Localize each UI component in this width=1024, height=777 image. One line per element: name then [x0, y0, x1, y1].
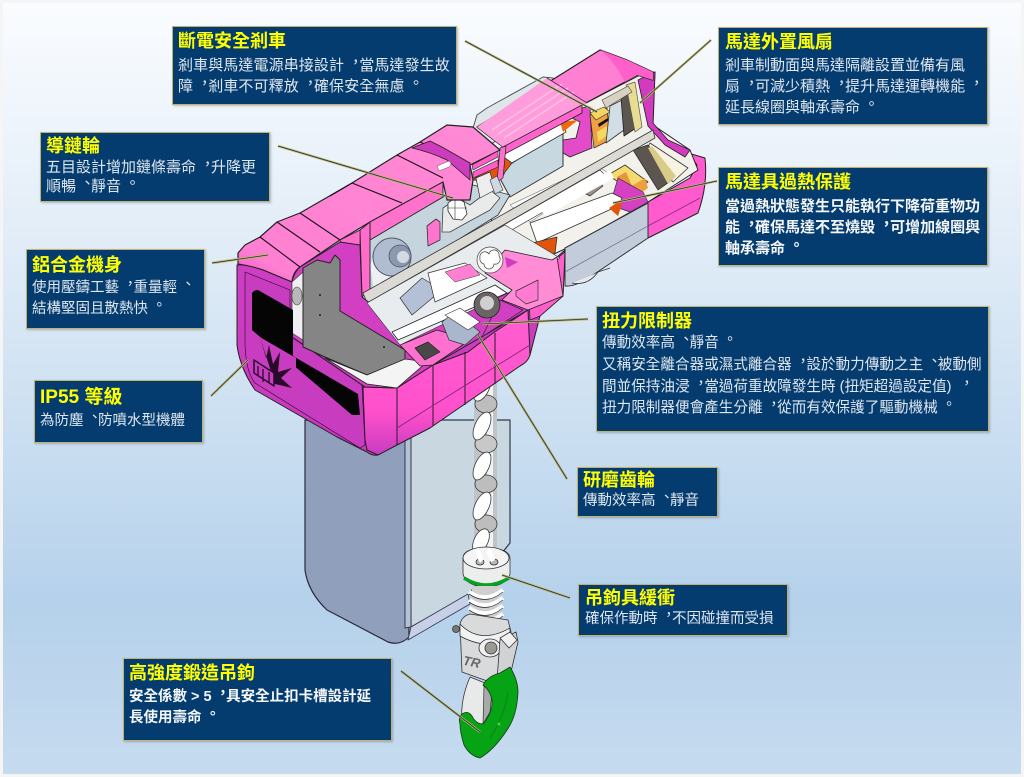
panel: motor overheat protection: 軸承壽命 。 — [725, 237, 804, 257]
panel: torque limiter: 間並保持油浸 ，當過荷重故障發生時 (扭矩超過設定值) ， — [602, 376, 974, 395]
glass fan cover — [473, 77, 560, 145]
main top housing — [238, 125, 500, 297]
panel: motor overheat protection: 能 ，確保馬達不至燒毀 ，可增加線圈與 — [725, 216, 980, 236]
panel: IP55 rating: IP55 等級 — [40, 387, 122, 408]
support rail — [363, 130, 655, 310]
cap and front housing body — [237, 250, 565, 455]
panel: power-off safety brake — [172, 26, 457, 105]
panel: power-off safety brake: 障 ，剎車不可釋放 ，確保安全無慮 。 — [178, 75, 424, 95]
panel: external motor fan — [718, 27, 988, 125]
panel: chain guide wheel: 五目設計增加鏈條壽命 ，升降更 — [46, 156, 256, 176]
right end housing — [648, 153, 706, 238]
leader line: chain wheel — [278, 146, 453, 198]
panel: aluminium alloy body: 鋁合金機身 — [32, 255, 122, 275]
panel: ground gear: 研磨齒輪 — [583, 470, 655, 490]
load chain — [469, 372, 497, 558]
drive compartment window — [367, 172, 510, 298]
panel: motor overheat protection: 馬達具過熱保護 — [725, 172, 851, 192]
upper motor shell — [477, 50, 653, 182]
panel: power-off safety brake: 斷電安全剎車 — [178, 31, 286, 51]
panel: aluminium alloy body: 結構堅固且散熱快 。 — [32, 298, 166, 317]
leader line: fan — [640, 40, 711, 103]
panel: torque limiter: 扭力限制器便會產生分離 ，從而有效保護了驅動機械 。 — [602, 397, 956, 416]
logo plate — [254, 336, 296, 398]
panel: motor overheat protection: 當過熱狀態發生只能執行下降荷重物功 — [725, 198, 980, 215]
panel: aluminium alloy body: 使用壓鑄工藝 ，重量輕 、 — [32, 277, 196, 296]
panel: external motor fan: 延長線圈與軸承壽命 。 — [725, 96, 879, 116]
leader line: hook buffer — [502, 575, 570, 598]
panel: power-off safety brake: 剎車與馬達電源串接設計 ，當馬達發生故 — [178, 54, 450, 74]
grey motor cover — [565, 203, 648, 286]
panel: high-strength forged hook: 長使用壽命 。 — [129, 707, 220, 726]
panel: high-strength forged hook: 安全係數 > 5 ，具安全止扣卡槽設計延 — [129, 686, 371, 705]
panel: IP55 rating — [34, 380, 203, 443]
panel: torque limiter: 扭力限制器 — [602, 311, 692, 331]
panel: ground gear: 傳動效率高 、靜音 — [583, 490, 699, 509]
motor cavity — [472, 72, 698, 290]
panel: chain guide wheel: 導鏈輪 — [46, 136, 100, 156]
leader line: aluminium body — [212, 255, 268, 263]
panel: motor overheat protection — [718, 167, 988, 266]
leader line: forged hook — [401, 671, 480, 732]
panel: hook buffer — [578, 584, 788, 636]
nameplate black stripe — [252, 290, 360, 415]
hook swivel collar: TR — [462, 653, 482, 671]
leader line: overheat — [613, 181, 717, 203]
panel: IP55 rating: 為防塵 、防噴水型機體 — [40, 410, 185, 429]
panel: chain guide wheel — [40, 132, 270, 202]
panel: external motor fan: 扇 ，可減少積熱 ，提升馬達運轉機能 ， — [725, 75, 984, 95]
leader line: brake — [465, 41, 597, 112]
panel: ground gear — [577, 467, 718, 517]
spring buffer — [463, 547, 510, 624]
panel: aluminium alloy body — [26, 249, 205, 329]
panel: high-strength forged hook: 高強度鍛造吊鉤 — [129, 663, 255, 683]
leader line: ground gear — [478, 335, 567, 479]
panel: torque limiter: 傳動效率高 、靜音 。 — [602, 332, 737, 351]
panel: torque limiter: 又稱安全離合器或濕式離合器 ，設於動力傳動之主 、被動側 — [602, 354, 982, 373]
panel: high-strength forged hook — [123, 658, 392, 741]
leader line: torque limiter — [482, 319, 588, 324]
panel: torque limiter — [596, 306, 989, 432]
panel: external motor fan: 馬達外置風扇 — [725, 32, 833, 52]
green hook — [459, 667, 518, 758]
leader line: IP55 — [211, 360, 248, 396]
panel: hook buffer: 確保作動時 ，不因碰撞而受損 — [585, 608, 774, 627]
chain bag — [305, 420, 510, 643]
lower interior cutaway — [292, 225, 563, 388]
panel: hook buffer: 吊鉤具緩衝 — [585, 588, 675, 608]
panel: chain guide wheel: 順暢 、靜音 。 — [46, 175, 140, 195]
panel: external motor fan: 剎車制動面與馬達隔離設置並備有風 — [725, 57, 965, 74]
hook swivel collar — [452, 614, 518, 682]
